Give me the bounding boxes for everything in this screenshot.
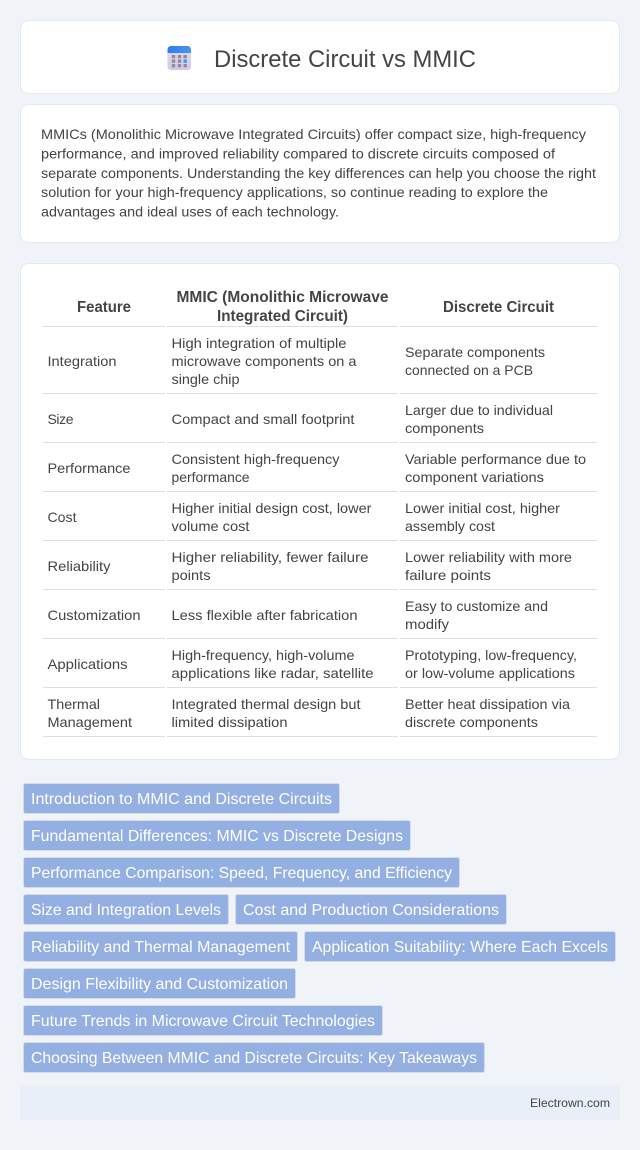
row: thermal management: Integrated thermal design but <box>172 696 361 712</box>
row: cost: Lower initial cost, higher <box>405 500 560 516</box>
row: thermal management: Thermal <box>48 696 100 712</box>
row: performance: Performance <box>48 460 131 476</box>
row: thermal management <box>48 696 570 730</box>
icon: calendar <box>168 46 191 70</box>
footer source: Electrown.com <box>530 1096 610 1110</box>
row: size: Size <box>48 411 74 427</box>
panel: introduction <box>20 104 620 242</box>
tag: introduction: Introduction to MMIC and Discrete Circuits <box>31 791 332 808</box>
row: reliability: failure points <box>405 567 491 583</box>
row: reliability: Reliability <box>48 558 110 574</box>
intro text: advantages and ideal uses of each technology. <box>41 204 339 220</box>
tag: reliability and thermal: Reliability and Thermal Management <box>31 939 291 956</box>
tag: future trends: Future Trends in Microwave Circuit Technologies <box>31 1013 375 1030</box>
row: cost: assembly cost <box>405 518 495 534</box>
row: applications: applications like radar, satellite <box>172 665 374 681</box>
row: size: Compact and small footprint <box>172 411 355 427</box>
row: performance: performance <box>172 469 250 485</box>
intro text: performance, and improved reliability compared to discrete circuits composed of <box>41 146 555 162</box>
tag: fundamental differences: Fundamental Differences: MMIC vs Discrete Designs <box>31 828 403 845</box>
row: size: components <box>405 420 484 436</box>
tag: future trends <box>24 1006 382 1036</box>
row: reliability: Higher reliability, fewer failure <box>172 549 369 565</box>
row: integration: Separate components <box>405 344 545 360</box>
tag: design flexibility <box>24 968 296 998</box>
row: cost: Higher initial design cost, lower <box>172 500 372 516</box>
row: integration: single chip <box>172 371 240 387</box>
title: Discrete Circuit vs MMIC <box>214 46 476 73</box>
tag: introduction <box>24 784 340 814</box>
tag: performance comparison <box>24 858 460 888</box>
row: customization: Easy to customize and <box>405 598 548 614</box>
row: integration: High integration of multiple <box>172 335 347 351</box>
tag: size and integration: Size and Integration Levels <box>31 902 221 919</box>
tag: design flexibility: Design Flexibility and Customization <box>31 976 288 993</box>
panel: title card <box>20 20 620 94</box>
row: customization: modify <box>405 616 449 632</box>
row: size <box>48 402 553 436</box>
table header: Feature <box>77 299 131 316</box>
table header: MMIC (Monolithic Microwave <box>176 289 389 306</box>
tag: choosing <box>24 1042 484 1072</box>
topic tags <box>24 784 616 1072</box>
row: applications <box>48 647 577 681</box>
panel: comparison table <box>20 264 620 760</box>
tag: performance comparison: Performance Comparison: Speed, Frequency, and Efficiency <box>31 865 452 882</box>
tag: application suitability <box>304 932 616 962</box>
row: size: Larger due to individual <box>405 402 553 418</box>
row: performance: Variable performance due to <box>405 451 586 467</box>
row: thermal management: Better heat dissipation via <box>405 696 570 712</box>
intro text: MMICs (Monolithic Microwave Integrated Circuits) offer compact size, high-frequency <box>41 126 586 142</box>
row: performance: Consistent high-frequency <box>172 451 340 467</box>
row: reliability: Lower reliability with more <box>405 549 572 565</box>
row: cost: volume cost <box>172 518 250 534</box>
row: integration <box>48 335 545 387</box>
row: reliability <box>48 549 572 583</box>
row: integration: connected on a PCB <box>405 362 533 378</box>
row: cost <box>48 500 560 534</box>
tag: cost and production: Cost and Production Considerations <box>243 902 499 919</box>
row: cost: Cost <box>48 509 77 525</box>
intro text: solution for your high-frequency applications, so continue reading to explore the <box>41 184 548 200</box>
table header: Integrated Circuit) <box>217 308 348 325</box>
row: thermal management: discrete components <box>405 714 538 730</box>
intro text: separate components. Understanding the key differences can help you choose the right <box>41 165 596 181</box>
row: customization: Customization <box>48 607 140 623</box>
row: integration: Integration <box>48 353 116 369</box>
table header <box>77 289 555 325</box>
row: thermal management: Management <box>48 714 132 730</box>
tag: size and integration <box>24 894 228 924</box>
row: thermal management: limited dissipation <box>172 714 288 730</box>
row: applications: Prototyping, low-frequency, <box>405 647 577 663</box>
row: integration: microwave components on a <box>172 353 357 369</box>
row: applications: or low-volume applications <box>405 665 575 681</box>
tag: fundamental differences <box>24 820 410 850</box>
intro text <box>41 126 596 220</box>
row: performance: component variations <box>405 469 544 485</box>
row: applications: High-frequency, high-volume <box>172 647 355 663</box>
tag: reliability and thermal <box>24 932 298 962</box>
row: customization: Less flexible after fabrication <box>172 607 358 623</box>
row: reliability: points <box>172 567 210 583</box>
row: applications: Applications <box>48 656 128 672</box>
tag: application suitability: Application Suitability: Where Each Excels <box>312 939 608 956</box>
table header: Discrete Circuit <box>443 299 555 316</box>
tag: choosing: Choosing Between MMIC and Discrete Circuits: Key Takeaways <box>31 1050 477 1067</box>
row: customization <box>48 598 548 632</box>
row: performance <box>48 451 586 485</box>
tag: cost and production <box>236 894 506 924</box>
footer <box>20 1086 620 1120</box>
